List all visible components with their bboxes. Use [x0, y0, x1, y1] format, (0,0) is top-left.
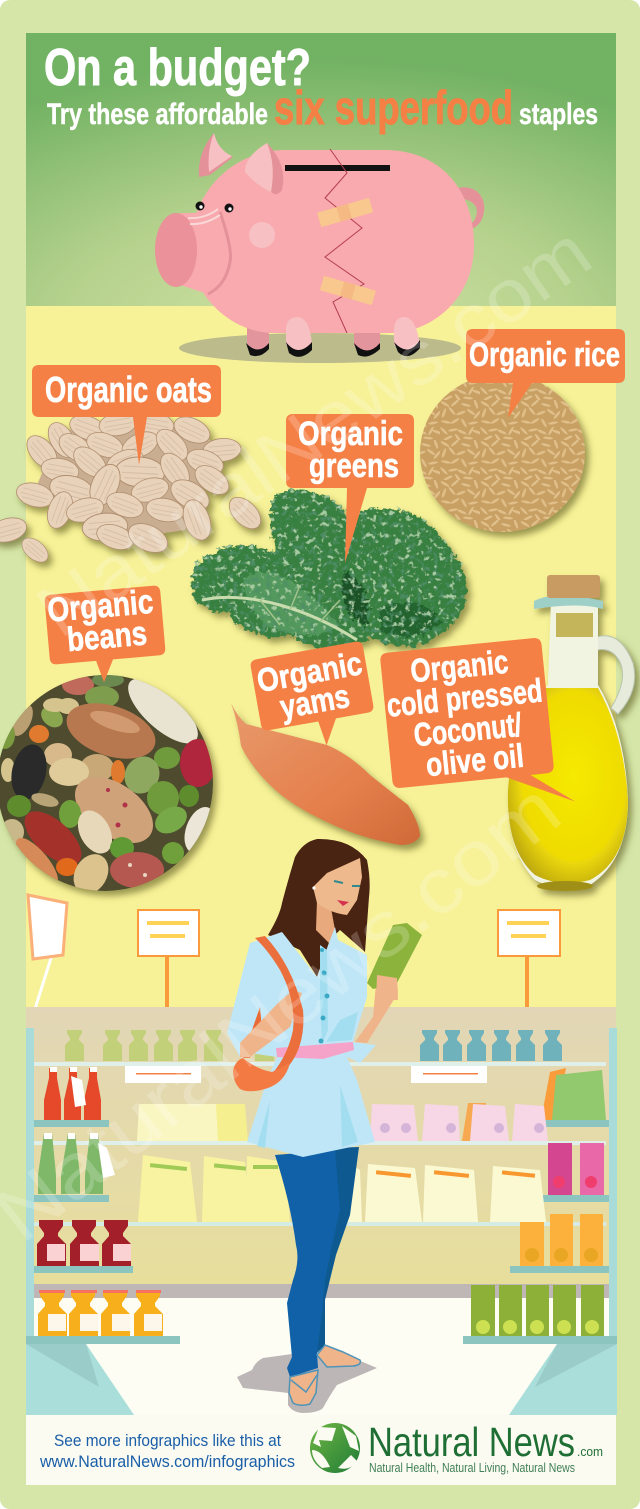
- shelves and uprights: [26, 1028, 617, 1344]
- bag: [233, 1058, 290, 1091]
- callout: organic beans: Organic: [46, 583, 155, 630]
- green snack bag: [541, 1068, 606, 1120]
- logo: globe: [310, 1423, 360, 1473]
- dark red jars: [37, 1220, 131, 1266]
- bottom shelf left with base: [26, 1336, 180, 1415]
- jeans back leg: [317, 1147, 359, 1353]
- orange cartons: [520, 1214, 603, 1266]
- fingers: [376, 975, 398, 1000]
- bottom shelf right with base: [463, 1336, 617, 1415]
- store sign: right: [498, 910, 560, 1008]
- buttons: [318, 948, 330, 1044]
- illustration: piggy bank: [155, 133, 484, 363]
- rear bag strap: [243, 1007, 262, 1058]
- hair: [268, 839, 370, 977]
- photo: organic yam: [231, 703, 420, 845]
- title: [44, 39, 598, 134]
- arm holding product: [355, 973, 398, 1043]
- eyes: [334, 881, 360, 886]
- product carton: [367, 923, 422, 989]
- callout: organic oil: Coconut/: [412, 706, 523, 753]
- blouse: [227, 927, 376, 1157]
- blouse shading: [257, 945, 358, 1148]
- middle shelf bags right: [370, 1103, 548, 1141]
- callout: organic greens: greens: [309, 447, 399, 485]
- callout: organic oil: cold pressed: [385, 672, 544, 724]
- callout: organic beans: [44, 582, 168, 687]
- store sign: left tilted: [28, 895, 67, 1028]
- watermark: upper: NaturalNews.com: [22, 209, 606, 653]
- green jars top shelf: [65, 1030, 274, 1061]
- shelf bracket: [510, 1266, 609, 1273]
- shelf bracket: [34, 1195, 109, 1202]
- skirting strip: [34, 1284, 609, 1298]
- red sauce bottles: [44, 1067, 101, 1120]
- footer text: See more infographics like this at: [54, 1431, 281, 1450]
- shelf bracket: [534, 1120, 609, 1127]
- pink cartons: [548, 1143, 604, 1195]
- face: [313, 858, 362, 915]
- logo: Natural News wordmark: Natural News: [368, 1419, 575, 1465]
- illustration: woman shopper: [227, 839, 422, 1405]
- lips: [337, 900, 349, 906]
- panel: green header sky: [26, 33, 616, 306]
- photo: organic beans: [0, 668, 221, 900]
- callout: organic oil: [380, 636, 575, 820]
- panel: shelf back wall: [26, 1007, 616, 1284]
- callout: organic yams: yams: [277, 677, 352, 726]
- orange jars: [38, 1290, 163, 1336]
- callout: organic greens: Organic: [298, 415, 403, 453]
- shelf bracket: [534, 1195, 609, 1202]
- earring: [312, 886, 316, 890]
- title: On a budget?: [44, 39, 311, 97]
- store sign: centre left: [138, 910, 199, 1008]
- logo: Natural News wordmark: Natural Health, Natural Living, Natural News: [369, 1461, 575, 1475]
- arm on strap: [240, 990, 302, 1057]
- photo: organic rice: [420, 374, 585, 532]
- callout: organic oats: [32, 365, 221, 465]
- lower shelf bags left: [138, 1155, 290, 1222]
- belt: [276, 1042, 354, 1059]
- floor: [26, 1284, 616, 1415]
- shelf bracket: [34, 1266, 133, 1273]
- middle shelf bags left: [137, 1104, 248, 1141]
- footer text: www.NaturalNews.com/infographics: [39, 1452, 295, 1471]
- callout: organic rice: [466, 329, 625, 418]
- shelf price labels: [125, 1066, 487, 1083]
- panel: footer: [26, 1415, 616, 1485]
- lower shelf bags right: [345, 1164, 546, 1222]
- panel: yellow wall: [26, 306, 616, 1007]
- green cartons: [471, 1285, 604, 1336]
- title: staples: [519, 98, 598, 131]
- jeans front leg: [275, 1150, 340, 1377]
- callout: organic oats: Organic oats: [45, 369, 212, 410]
- callout: organic oil: olive oil: [424, 737, 525, 783]
- callout: organic yams: Organic: [254, 644, 365, 699]
- title: six superfood: [274, 81, 513, 134]
- title: Try these affordable: [47, 98, 268, 131]
- green bottles: [38, 1133, 115, 1194]
- shelf bracket: [34, 1120, 109, 1127]
- callout: organic yams: [250, 641, 379, 756]
- photo: organic greens: [191, 490, 467, 648]
- floor shadow: [237, 1354, 377, 1413]
- foot left: [289, 1370, 318, 1405]
- foot right: [317, 1345, 360, 1367]
- flip flop strap: [291, 1375, 317, 1392]
- callout: organic greens: [286, 414, 414, 563]
- callout: organic oil: Organic: [409, 643, 510, 689]
- blue jars top shelf: [420, 1030, 562, 1061]
- neck: [316, 900, 335, 943]
- footer text: [39, 1431, 295, 1471]
- callout: organic beans: beans: [66, 614, 149, 659]
- bag strap: [255, 936, 303, 1074]
- photo: oil bottle: [508, 575, 635, 891]
- logo: Natural News wordmark: .com: [577, 1444, 603, 1459]
- photo: organic oats: [0, 409, 267, 567]
